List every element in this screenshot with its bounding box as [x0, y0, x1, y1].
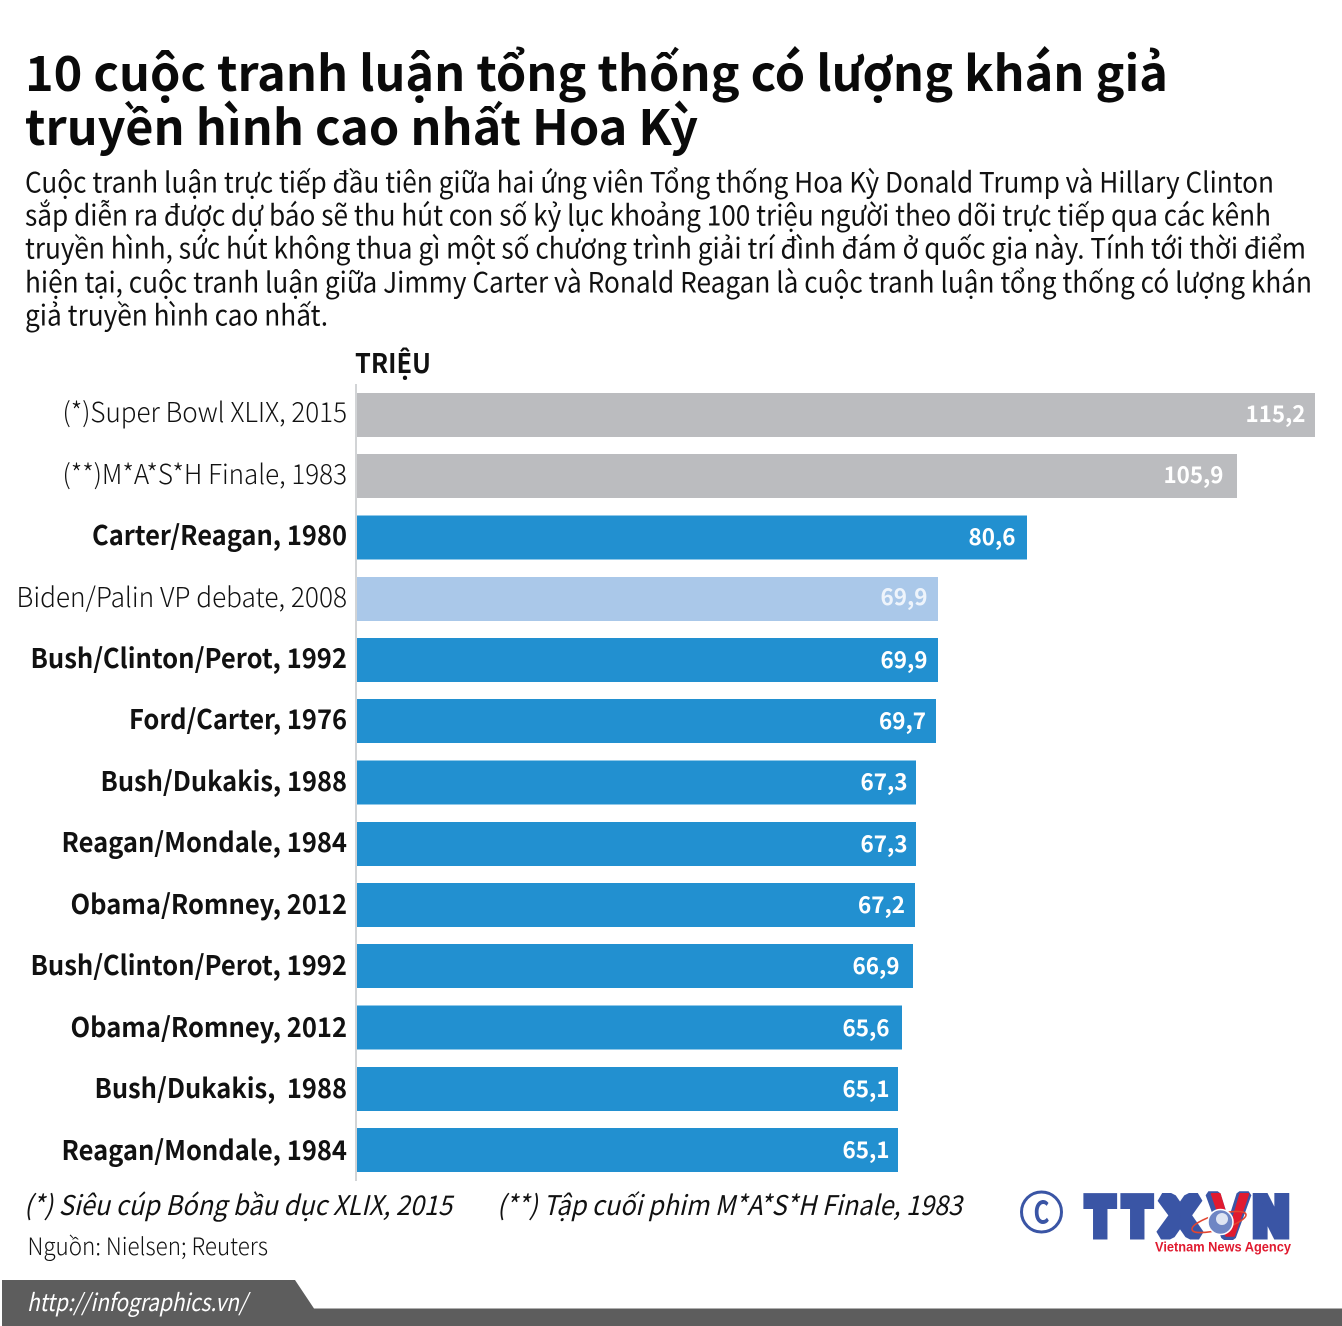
- row: Reagan/Mondale: Reagan/Mondale, 1984: [62, 1128, 347, 1168]
- intro text: sắp diễn ra được dự báo sẽ thu hút con số kỷ lục khoảng 100 triệu người theo dõi trực tiếp qua các kênh: [25, 194, 1271, 234]
- icon: globe: [1190, 1207, 1248, 1237]
- row: Reagan/Mondale: Reagan/Mondale, 1984: [62, 820, 347, 860]
- row: Reagan/Mondale: [62, 1128, 898, 1172]
- row: Carter/Reagan: Carter/Reagan, 1980: [92, 513, 347, 553]
- row: Obama/Romney: 67,2: [858, 886, 905, 920]
- row: Super Bowl: [62, 390, 1315, 437]
- intro text: [25, 160, 1312, 334]
- icon: copyright: [1022, 1188, 1062, 1232]
- axis unit label: TRIỆU: [355, 342, 431, 381]
- logo: TTXVN: T: [1087, 1188, 1114, 1246]
- icon: copyright: C: [1034, 1188, 1050, 1232]
- row: Bush/Dukakis: [94, 1066, 898, 1111]
- footer band: [2, 1280, 1342, 1326]
- row: Bush/Clinton/Perot: 69,9: [880, 641, 928, 675]
- footnote 2: (**) Tập cuối phim M*A*S*H Finale, 1983: [497, 1183, 965, 1223]
- row: Super Bowl: 115,2: [1246, 395, 1306, 429]
- row: Ford/Carter: [129, 697, 936, 743]
- row: Biden/Palin: 69,9: [880, 578, 928, 612]
- title: truyền hình cao nhất Hoa Kỳ: [25, 89, 698, 159]
- row: MASH: (**)M*A*S*H Finale, 1983: [62, 452, 347, 492]
- logo: TTXVN: V: [1208, 1182, 1249, 1251]
- logo: TTXVN: N: [1254, 1188, 1288, 1246]
- row: Biden/Palin: [16, 575, 938, 621]
- row: Bush/Clinton/Perot: [30, 636, 938, 682]
- row: Bush/Dukakis: 65,1: [842, 1070, 890, 1104]
- logo: TTXVN: T: [1124, 1188, 1150, 1246]
- row: Bush/Dukakis: [100, 759, 916, 804]
- row: Obama/Romney: Obama/Romney, 2012: [70, 882, 347, 922]
- row: Reagan/Mondale: 67,3: [860, 825, 908, 859]
- row: Reagan/Mondale: 65,1: [842, 1131, 890, 1165]
- title: 10 cuộc tranh luận tổng thống có lượng khán giả: [25, 35, 1168, 105]
- logo: TTXVN: V: [1211, 1181, 1249, 1249]
- row: Super Bowl: (*)Super Bowl XLIX, 2015: [62, 390, 347, 430]
- row: Reagan/Mondale: [62, 820, 916, 866]
- row: MASH: 105,9: [1164, 456, 1224, 490]
- footnote 1: (*) Siêu cúp Bóng bầu dục XLIX, 2015: [24, 1183, 455, 1223]
- row: Bush/Clinton/Perot: [30, 943, 913, 988]
- row: Obama/Romney: 65,6: [842, 1009, 890, 1043]
- row: Ford/Carter: Ford/Carter, 1976: [129, 697, 347, 737]
- intro text: Cuộc tranh luận trực tiếp đầu tiên giữa hai ứng viên Tổng thống Hoa Kỳ Donald Trump và Hillary Clinton: [25, 160, 1274, 202]
- source: Nguồn: Nielsen; Reuters: [28, 1227, 268, 1262]
- row: Carter/Reagan: [92, 513, 1027, 560]
- intro text: giả truyền hình cao nhất.: [25, 294, 328, 334]
- row: Biden/Palin: Biden/Palin VP debate, 2008: [16, 575, 347, 615]
- row: Obama/Romney: Obama/Romney, 2012: [70, 1005, 347, 1045]
- logo: TTXVN: Vietnam News Agency: [1155, 1240, 1291, 1254]
- footer url: http://infographics.vn/: [27, 1283, 251, 1318]
- row: Bush/Dukakis: 67,3: [860, 763, 908, 797]
- row: MASH: [62, 452, 1237, 498]
- row: Bush/Clinton/Perot: 66,9: [852, 947, 900, 981]
- row: Bush/Clinton/Perot: Bush/Clinton/Perot, 1992: [30, 636, 347, 676]
- row: Obama/Romney: [70, 882, 915, 927]
- row: Bush/Clinton/Perot: Bush/Clinton/Perot, 1992: [30, 943, 347, 983]
- logo: TTXVN: [1087, 1181, 1291, 1254]
- row: Bush/Dukakis: Bush/Dukakis, 1988: [100, 759, 347, 799]
- row: Ford/Carter: 69,7: [879, 702, 926, 736]
- row: Bush/Dukakis: Bush/Dukakis, 1988: [94, 1066, 347, 1106]
- bar chart: [16, 384, 1315, 1181]
- row: Obama/Romney: [70, 1005, 902, 1050]
- title: [25, 35, 1168, 159]
- row: Carter/Reagan: 80,6: [968, 518, 1016, 552]
- logo: TTXVN: X: [1160, 1188, 1200, 1246]
